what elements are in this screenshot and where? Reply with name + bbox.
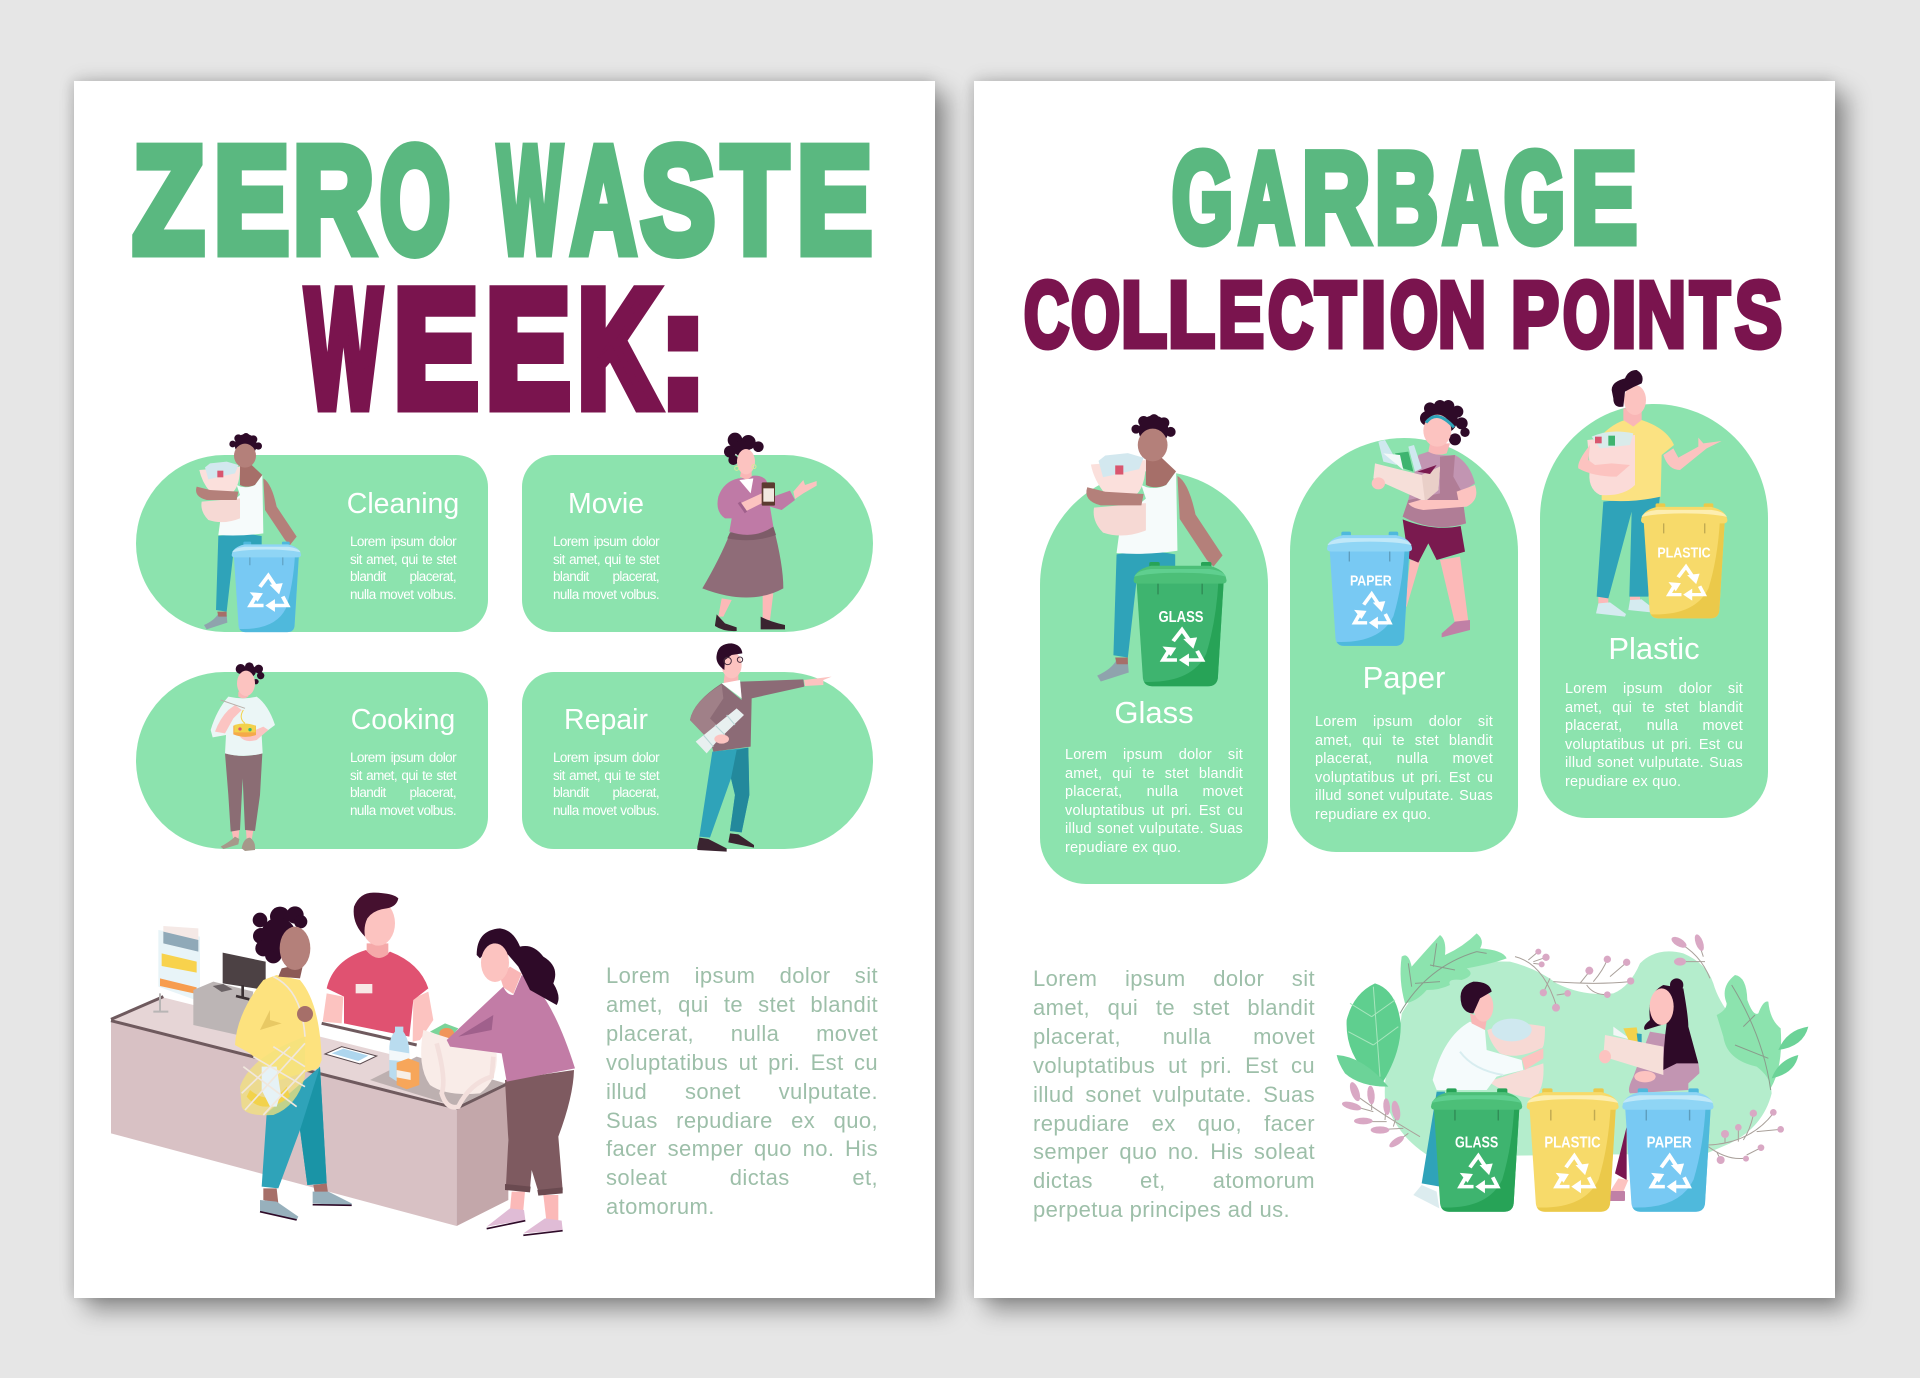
title: collection points: N	[1438, 263, 1486, 367]
panel: glass	[1040, 471, 1268, 884]
title: zero waste: E	[797, 115, 872, 284]
title: collection points: O	[1071, 263, 1120, 367]
title: garbage: E	[1571, 127, 1637, 270]
panel: repair	[522, 672, 873, 849]
text: left page body: Suas repudiare ex quo,	[606, 1108, 878, 1133]
text: left page body: placerat, nulla movet	[606, 1021, 878, 1046]
text: right page body	[1033, 966, 1315, 1222]
text: right page body: Lorem ipsum dolor sit	[1033, 966, 1315, 991]
text: left page body: Lorem ipsum dolor sit	[606, 963, 878, 988]
title: collection points: N	[1637, 263, 1686, 367]
text: repair description: Lorem ipsum dolor	[553, 750, 659, 765]
panel: cleaning	[136, 455, 488, 632]
title: garbage: B	[1375, 127, 1438, 270]
title: collection points: T	[1315, 263, 1356, 367]
text: paper description	[1315, 714, 1493, 823]
bin: paper: PAPER	[1647, 1134, 1692, 1151]
text: right page body: semper quo no. His soleat	[1033, 1139, 1315, 1164]
text: left page body: voluptatibus ut pri. Est cu	[606, 1050, 878, 1075]
bin: paper	[1622, 1088, 1714, 1212]
title: zero waste: T	[722, 115, 788, 284]
cashier	[323, 893, 433, 1042]
title: collection points: P	[1511, 263, 1559, 367]
text: left page body	[606, 963, 878, 1219]
title: collection points: O	[1563, 263, 1610, 367]
text: cleaning description: nulla movet volbus.	[350, 587, 456, 602]
text: repair description	[553, 750, 660, 818]
text: paper description: Lorem ipsum dolor sit	[1315, 714, 1493, 730]
text: cooking description: Lorem ipsum dolor	[350, 750, 456, 765]
figure: repair man	[690, 643, 832, 852]
text: glass description: placerat, nulla movet	[1065, 784, 1243, 800]
text: cooking description: sit amet, qui te stet	[350, 768, 456, 783]
bin: plastic: PLASTIC	[1544, 1134, 1601, 1151]
figure: movie woman	[702, 433, 817, 631]
text: cooking description: nulla movet volbus.	[350, 803, 456, 818]
panel: movie	[522, 455, 873, 632]
register	[193, 953, 266, 1037]
title: zero waste: A	[571, 115, 636, 284]
heading: paper: Paper	[1363, 660, 1445, 695]
title: garbage: A	[1443, 127, 1497, 270]
text: right page body: illud sonet vulputate. Suas	[1033, 1082, 1315, 1107]
bin: plastic	[1527, 1088, 1619, 1212]
text: glass description	[1065, 747, 1243, 856]
text: movie description: sit amet, qui te stet	[553, 552, 659, 567]
heading: glass: Glass	[1114, 695, 1194, 730]
text: right page body: voluptatibus ut pri. Est cu	[1033, 1053, 1315, 1078]
text: right page body: dictas et, atomorum	[1033, 1168, 1315, 1193]
title: collection points: L	[1168, 263, 1215, 367]
text: plastic description: amet, qui te stet blandit	[1565, 700, 1743, 716]
leaves	[1337, 933, 1808, 1090]
title: collection points: I	[1611, 263, 1637, 367]
title: collection points: L	[1121, 263, 1167, 367]
title: week: E	[394, 257, 478, 442]
counter	[111, 997, 508, 1226]
text: paper description: repudiare ex quo.	[1315, 807, 1431, 823]
page: zero waste week	[74, 81, 935, 1298]
text: glass description: amet, qui te stet blandit	[1065, 766, 1243, 782]
text: left page body: facer semper quo no. His	[606, 1136, 878, 1161]
text: right page body: perpetua principes ad us.	[1033, 1197, 1290, 1222]
text: repair description: nulla movet volbus.	[553, 803, 659, 818]
title: collection points: S	[1735, 263, 1782, 367]
heading: cleaning: Cleaning	[347, 488, 459, 520]
figure: plastic man with yellow bin	[1578, 370, 1727, 618]
customer with tote	[447, 928, 575, 1235]
panel: cooking	[136, 672, 488, 849]
title: garbage: G	[1504, 127, 1565, 270]
heading: movie: Movie	[568, 488, 644, 520]
text: glass description: voluptatibus ut pri. Est cu	[1065, 803, 1243, 819]
title: week: W	[306, 257, 381, 442]
text: left page body: soleat dictas et,	[606, 1165, 878, 1190]
text: cleaning description: blandit placerat,	[350, 569, 456, 584]
text: repair description: sit amet, qui te stet	[553, 768, 659, 783]
text: right page body: repudiare ex quo, facer	[1033, 1111, 1315, 1136]
title: garbage: A	[1239, 127, 1294, 270]
text: movie description: nulla movet volbus.	[553, 587, 659, 602]
illustration: checkout counter scene	[111, 893, 575, 1235]
man with bag	[1413, 982, 1545, 1208]
text: plastic description: placerat, nulla movet	[1565, 718, 1743, 734]
figure: cooking person	[211, 662, 275, 851]
title: zero waste: E	[214, 115, 289, 284]
text: cleaning description: sit amet, qui te stet	[350, 552, 456, 567]
text: plastic description: voluptatibus ut pri. Est cu	[1565, 737, 1743, 753]
bin label: paper: PAPER	[1350, 574, 1392, 590]
bin: glass: GLASS	[1455, 1134, 1498, 1151]
text: paper description: amet, qui te stet blandit	[1315, 733, 1493, 749]
title: zero waste: O	[380, 115, 450, 284]
text: paper description: placerat, nulla movet	[1315, 751, 1493, 767]
text: glass description: repudiare ex quo.	[1065, 840, 1181, 856]
text: movie description	[553, 534, 660, 602]
text: cooking description: blandit placerat,	[350, 785, 456, 800]
heading: cooking: Cooking	[351, 704, 455, 736]
title: garbage: R	[1302, 127, 1370, 270]
title: week: :	[660, 257, 706, 442]
figure: cleaning man with blue bin	[196, 433, 301, 632]
title: zero waste: Z	[133, 115, 204, 284]
title: collection points: I	[1360, 263, 1387, 367]
title: garbage: G	[1172, 127, 1233, 270]
title: zero waste: W	[498, 115, 562, 284]
text: plastic description	[1565, 681, 1743, 790]
text: plastic description: repudiare ex quo.	[1565, 774, 1681, 790]
text: plastic description: Lorem ipsum dolor sit	[1565, 681, 1743, 697]
bin: glass	[1431, 1088, 1522, 1212]
title: collection points: T	[1690, 263, 1730, 367]
text: paper description: voluptatibus ut pri. Est cu	[1315, 770, 1493, 786]
text: right page body: placerat, nulla movet	[1033, 1024, 1315, 1049]
text: movie description: blandit placerat,	[553, 569, 659, 584]
panel: paper	[1290, 438, 1518, 852]
title: zero waste: R	[293, 115, 374, 284]
display rack	[153, 926, 200, 1012]
background blob	[1385, 951, 1772, 1157]
text: left page body: amet, qui te stet blandit	[606, 992, 878, 1017]
title: week: K	[578, 257, 658, 442]
title: zero waste: S	[641, 115, 715, 284]
text: left page body: illud sonet vulputate.	[606, 1079, 878, 1104]
title: collection points: C	[1024, 263, 1069, 367]
woman with box	[1599, 978, 1699, 1201]
figure: glass man with green bin	[1086, 414, 1227, 686]
text: glass description: Lorem ipsum dolor sit	[1065, 747, 1243, 763]
title: week: E	[486, 257, 570, 442]
text: glass description: illud sonet vulputate. Suas	[1065, 821, 1243, 837]
heading: repair: Repair	[564, 704, 648, 736]
tote bag	[421, 1023, 497, 1107]
text: cleaning description: Lorem ipsum dolor	[350, 534, 456, 549]
text: paper description: illud sonet vulputate. Suas	[1315, 788, 1493, 804]
text: plastic description: illud sonet vulputate. Suas	[1565, 755, 1743, 771]
bin label: plastic: PLASTIC	[1657, 546, 1711, 562]
illustration: recycling couple with bins	[1337, 933, 1808, 1212]
title: collection points: C	[1268, 263, 1313, 367]
page: garbage collection points	[974, 81, 1835, 1298]
bin label: glass: GLASS	[1158, 609, 1204, 626]
figure: paper woman with blue bin	[1327, 400, 1476, 646]
pink twigs	[1341, 933, 1784, 1164]
text: cooking description	[350, 750, 456, 818]
panel: plastic	[1540, 404, 1768, 818]
title: collection points: E	[1218, 263, 1264, 367]
text: left page body: atomorum.	[606, 1194, 715, 1219]
text: cleaning description	[350, 534, 456, 602]
customer with net bag	[235, 906, 352, 1220]
heading: plastic: Plastic	[1608, 631, 1700, 666]
text: movie description: Lorem ipsum dolor	[553, 534, 659, 549]
title: collection points: O	[1390, 263, 1438, 367]
text: right page body: amet, qui te stet blandit	[1033, 995, 1315, 1020]
text: repair description: blandit placerat,	[553, 785, 659, 800]
counter items	[325, 1027, 419, 1089]
